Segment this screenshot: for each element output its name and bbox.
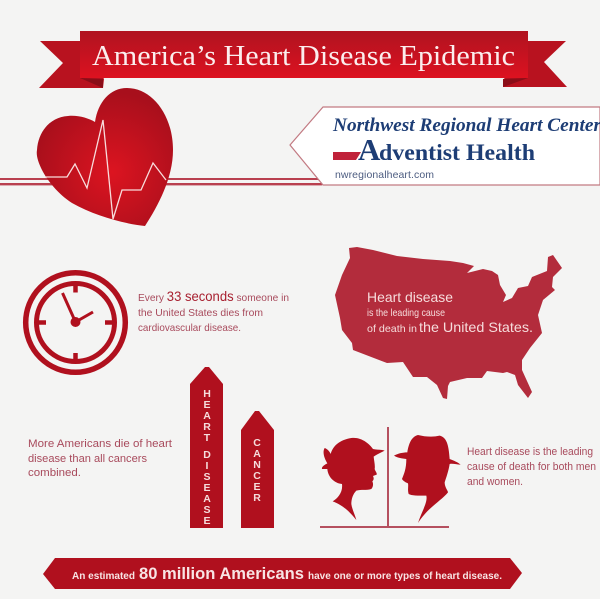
icon: heart with ECG line [37, 88, 173, 226]
arrow: cancer bar: N [253, 459, 261, 471]
text: leading cause in United States: the United States. [419, 319, 533, 335]
text: more Americans: More Americans die of heart [28, 438, 172, 450]
ribbon tail right [503, 41, 567, 87]
arrow: cancer bar: A [253, 448, 261, 460]
arrow: heart disease bar: D [203, 449, 211, 461]
icon: woman and man silhouettes [320, 427, 461, 528]
banner text: 80 million Americans [139, 564, 304, 583]
organisation name: Northwest Regional Heart Center [332, 115, 600, 136]
arrow: heart disease bar: T [204, 432, 211, 444]
logo: Adventist Health: A [358, 132, 381, 167]
arrow: heart disease bar: S [203, 504, 211, 516]
text: leading cause in United States: is the leading cause [367, 307, 445, 319]
text: men and women: Heart disease is the leading [467, 446, 593, 458]
arrow: heart disease bar: E [203, 399, 211, 411]
text: every 33 seconds: Every 33 seconds someone in [138, 289, 289, 304]
text: men and women [467, 446, 596, 488]
background lines behind heart [0, 178, 322, 185]
text: leading cause in United States: of death in [367, 323, 417, 335]
title ribbon [39, 31, 567, 88]
text: leading cause in United States [367, 289, 533, 335]
icon: clock [26, 273, 125, 372]
text: leading cause in United States: Heart disease [367, 289, 453, 305]
website: nwregionalheart.com [335, 169, 434, 181]
panel: logo tag [290, 107, 600, 185]
ribbon tail left [39, 41, 104, 88]
title: America’s Heart Disease Epidemic [92, 40, 515, 72]
text: more Americans: disease than all cancers [28, 453, 148, 465]
arrow: heart disease bar: E [203, 515, 211, 527]
arrow: heart disease bar: R [203, 421, 211, 433]
arrow: heart disease bar: S [203, 471, 211, 483]
text: men and women: and women. [467, 476, 523, 488]
silhouette: man [394, 435, 461, 523]
arrow: heart disease bar: A [203, 410, 211, 422]
arrow: heart disease bar: A [203, 493, 211, 505]
bottom banner [43, 558, 522, 589]
arrow: cancer bar: C [253, 437, 261, 449]
arrow: heart disease bar [190, 367, 223, 528]
text: every 33 seconds [138, 289, 289, 334]
text: more Americans: combined. [28, 467, 81, 479]
text: men and women: cause of death for both men [467, 461, 596, 473]
text: more Americans [28, 438, 172, 479]
map: United States [335, 247, 562, 399]
arrow: heart disease bar: I [206, 460, 209, 472]
banner text [72, 564, 502, 583]
arrow: cancer bar [241, 411, 274, 528]
logo: Adventist Health [333, 132, 535, 167]
arrow: cancer bar: R [253, 492, 261, 504]
arrow: heart disease bar: E [203, 482, 211, 494]
logo: Adventist Health: dventist Health [379, 140, 535, 165]
banner text: have one or more types of heart disease. [308, 570, 502, 582]
arrow: cancer bar: E [253, 481, 261, 493]
arrow: heart disease bar: H [203, 388, 211, 400]
text: every 33 seconds: cardiovascular disease. [138, 322, 241, 334]
arrow: cancer bar: C [253, 470, 261, 482]
banner text: An estimated [72, 570, 135, 582]
silhouette: woman [322, 438, 385, 520]
text: every 33 seconds: the United States dies from [138, 307, 263, 319]
